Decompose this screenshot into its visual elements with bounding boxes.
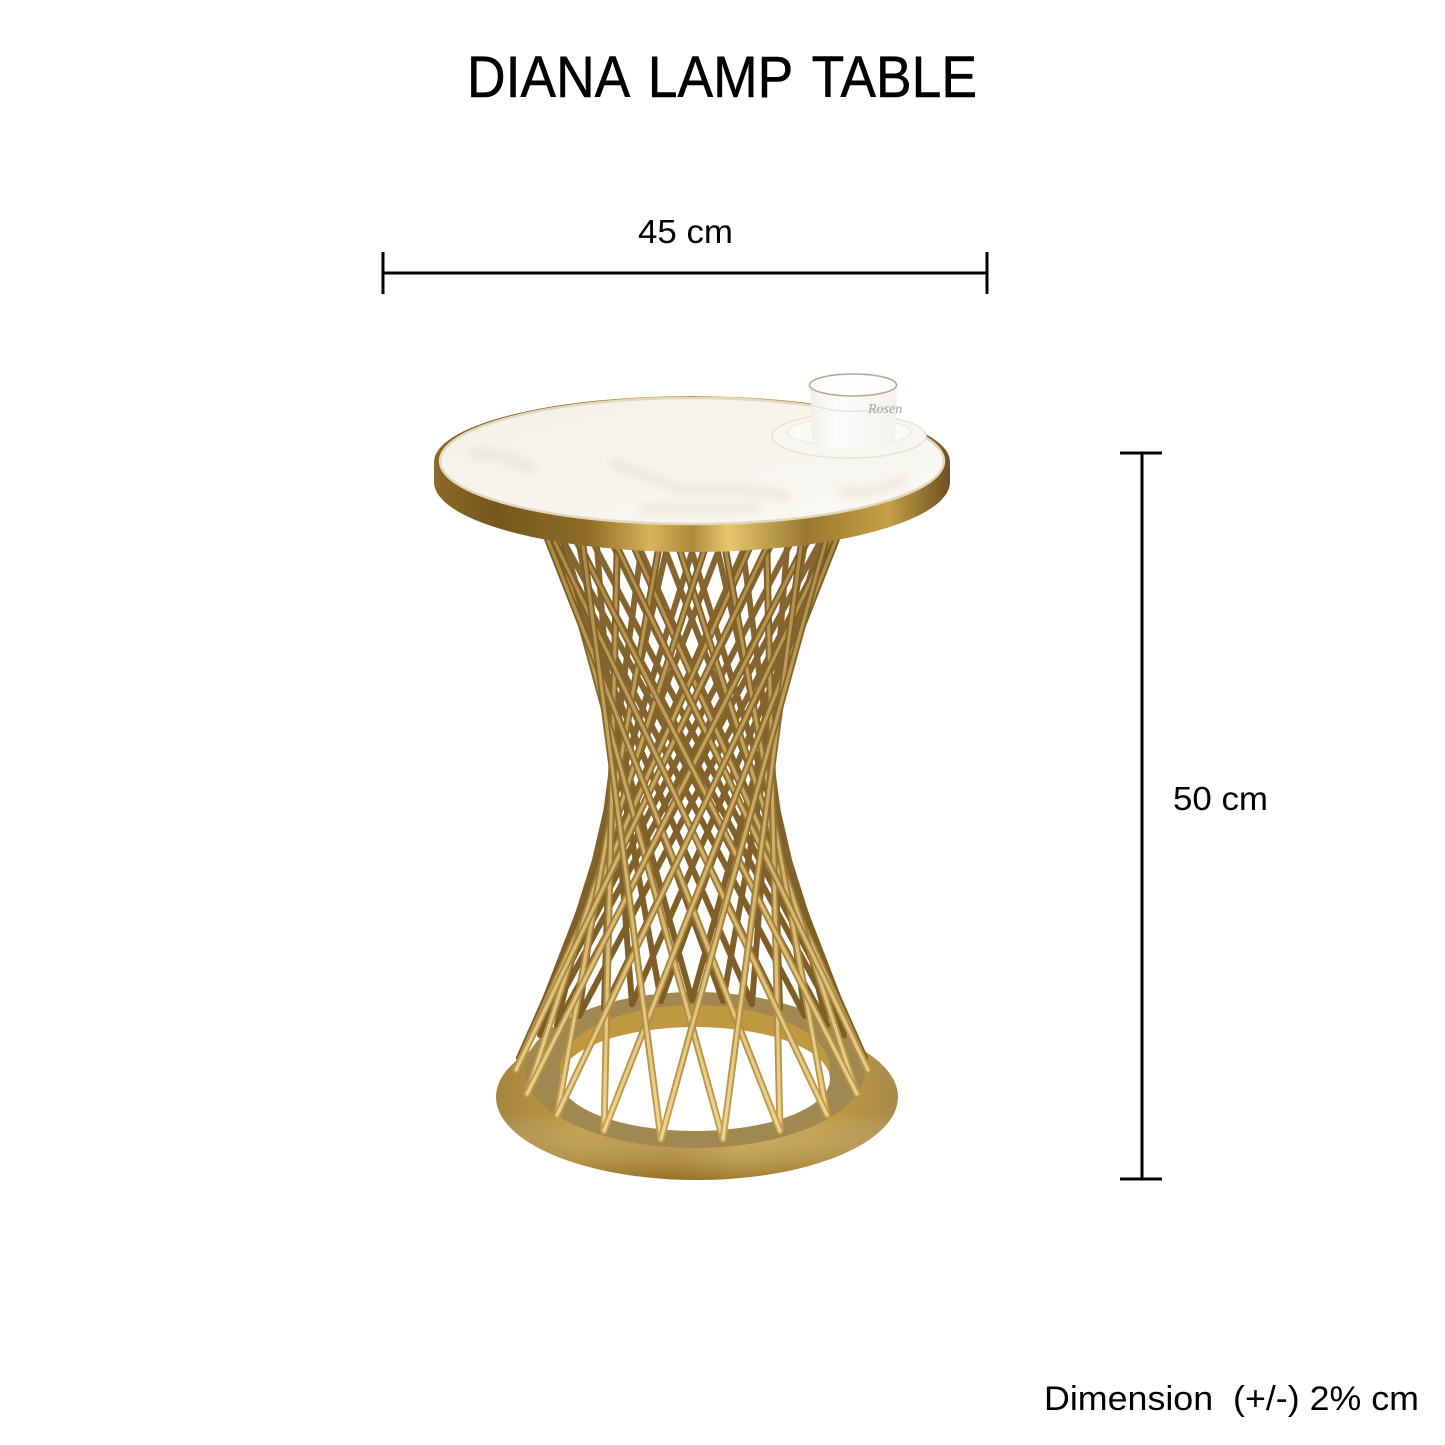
front rods bbox=[516, 508, 868, 1139]
width dimension line bbox=[383, 252, 987, 294]
table base bbox=[496, 992, 898, 1180]
height dimension line bbox=[1120, 453, 1162, 1179]
title: DIANA LAMP TABLE bbox=[467, 45, 977, 110]
marble table top bbox=[440, 398, 944, 524]
rear rods bbox=[519, 513, 865, 1058]
width dimension label: 45 cm bbox=[638, 213, 733, 250]
table top rim bbox=[434, 396, 950, 552]
cup lettering: Rosen bbox=[867, 402, 902, 417]
dimension tolerance note: Dimension (+/-) 2% cm bbox=[1044, 1380, 1419, 1418]
height dimension label: 50 cm bbox=[1173, 780, 1268, 817]
table illustration bbox=[434, 372, 950, 1180]
cup and saucer bbox=[772, 372, 926, 458]
